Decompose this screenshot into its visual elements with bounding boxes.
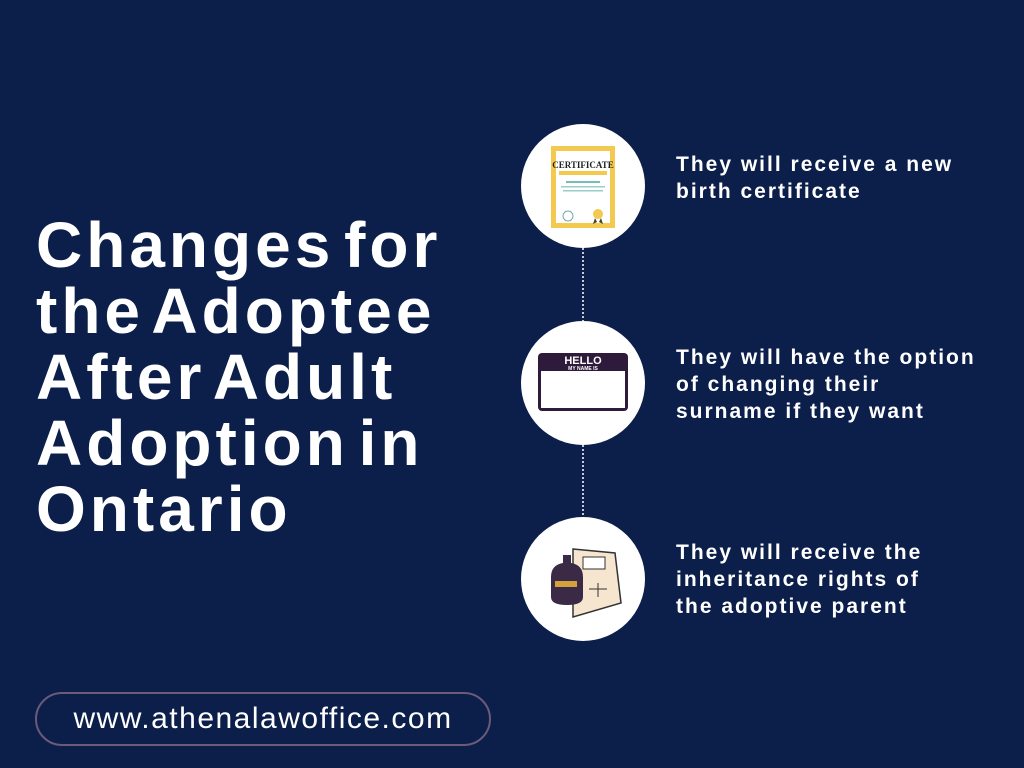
title: Adoption in [36,407,423,479]
text: inheritance [676,541,922,618]
text: surname [676,346,976,423]
text: certificate [676,153,953,203]
title [36,209,441,545]
icon: name tag: MY NAME IS [568,366,598,372]
icon: name tag: HELLO [564,355,602,367]
title: Changes for [36,209,441,281]
text: inheritance: They will receive the [676,541,922,564]
text: surname: of changing their [676,373,880,396]
title: the Adoptee [36,275,435,347]
text: certificate: They will receive a new [676,153,953,176]
icon: inheritance [521,517,645,641]
icon: name tag [521,321,645,445]
text: inheritance: the adoptive parent [676,595,908,618]
title: After Adult [36,341,396,413]
url pill: www.athenalawoffice.com [73,702,453,735]
icon: certificate [521,124,645,248]
url pill [35,692,491,746]
icon: certificate: CERTIFICATE [552,160,614,170]
title: Ontario [36,473,292,545]
text: inheritance: inheritance rights of [676,568,920,591]
text: certificate: birth certificate [676,180,862,203]
connector line 1 [582,248,584,322]
text: surname: They will have the option [676,346,976,369]
connector line 2 [582,445,584,519]
text: surname: surname if they want [676,400,925,423]
